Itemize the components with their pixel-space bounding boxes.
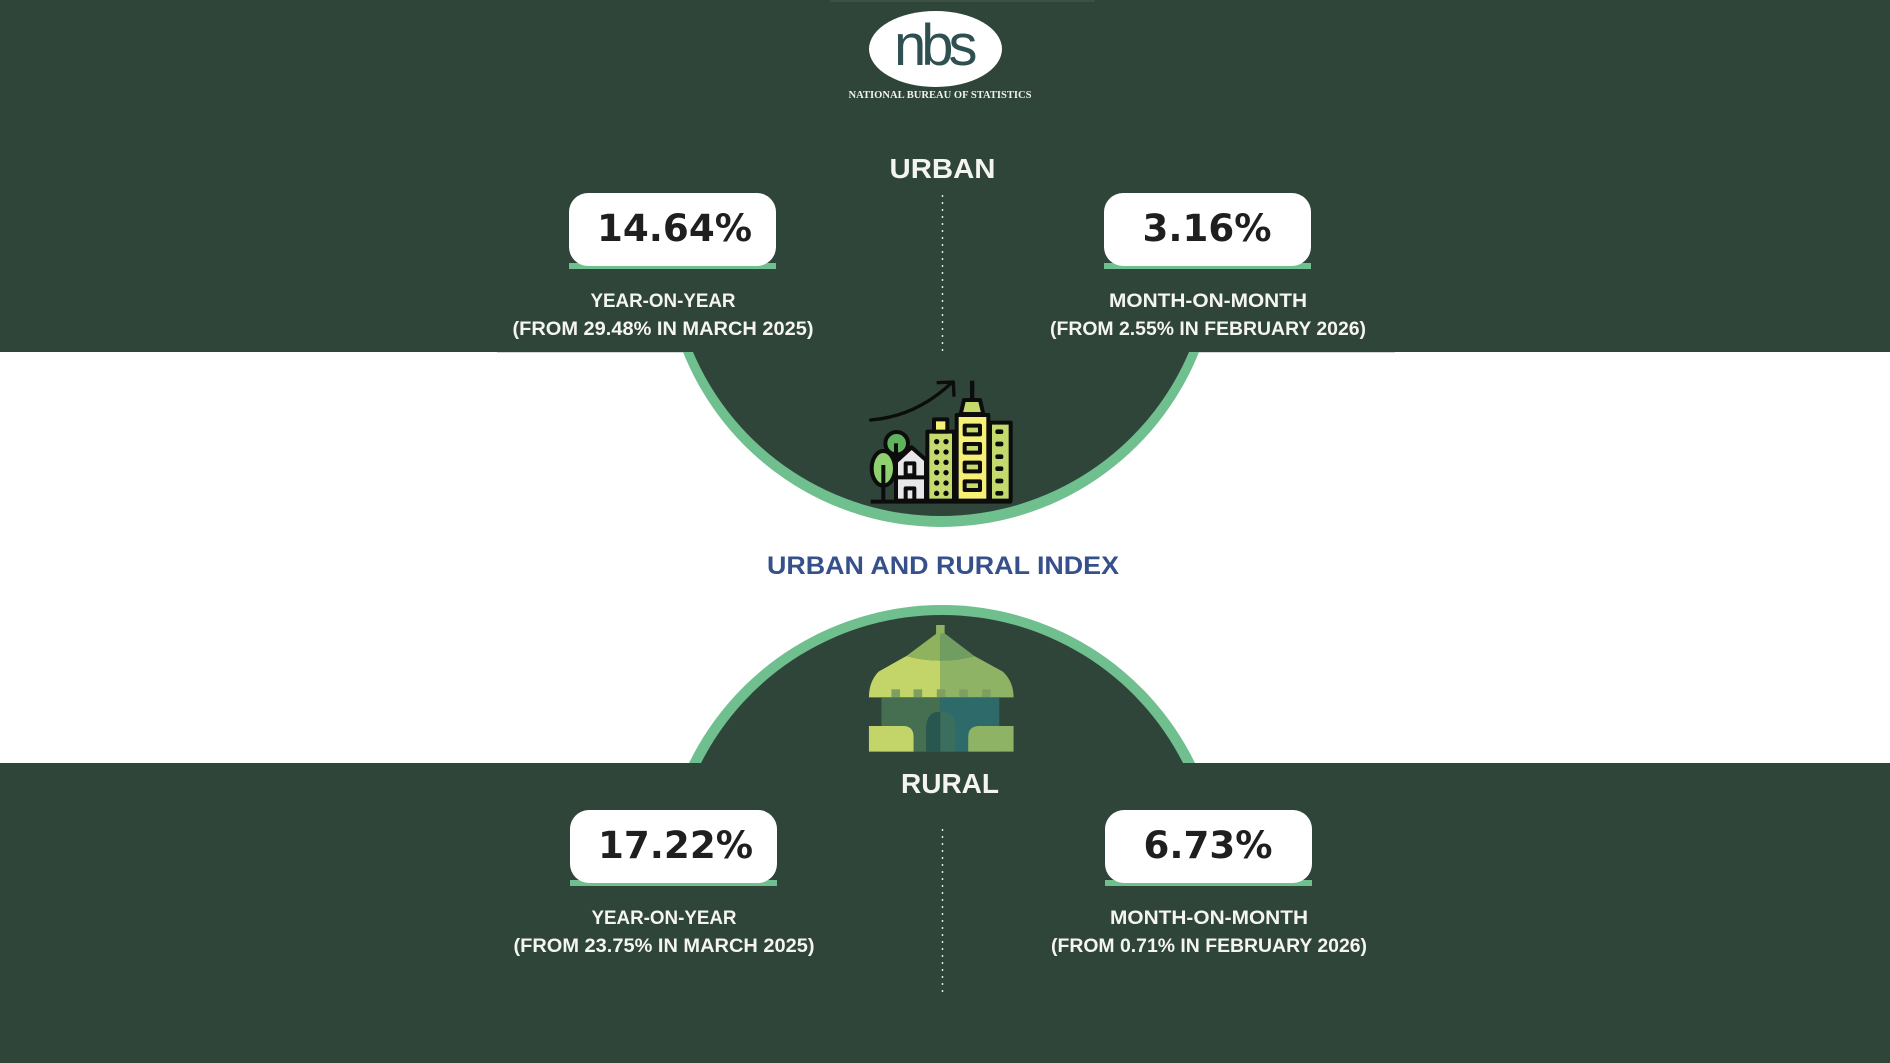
stat: rural year-on-year bbox=[514, 810, 814, 957]
stat: urban month-on-month: 3.16% bbox=[1142, 207, 1272, 250]
divider: rural dotted line bbox=[942, 829, 944, 994]
panel: top dark band bbox=[0, 0, 1890, 352]
icon: rural hut bbox=[869, 625, 1014, 752]
stat: rural month-on-month: (FROM 0.71% IN FEBRUARY 2026) bbox=[1051, 936, 1367, 957]
logo: NBS: NATIONAL BUREAU OF STATISTICS bbox=[848, 90, 1032, 101]
stat: urban year-on-year: 14.64% bbox=[597, 207, 752, 250]
stat: rural month-on-month: 6.73% bbox=[1144, 824, 1272, 867]
stat: urban year-on-year: (FROM 29.48% IN MARCH 2025) bbox=[512, 319, 814, 340]
logo: NBS bbox=[848, 11, 1032, 101]
panel: upper semicircle bbox=[683, 352, 1199, 527]
stat: urban month-on-month: MONTH-ON-MONTH bbox=[1109, 291, 1307, 312]
panel: bottom dark band bbox=[0, 763, 1890, 1063]
stat: urban year-on-year: YEAR-ON-YEAR bbox=[590, 291, 736, 312]
stat: rural month-on-month bbox=[1051, 810, 1367, 957]
stat: rural year-on-year: (FROM 23.75% IN MARCH 2025) bbox=[514, 936, 814, 957]
icon: city with rising arrow bbox=[871, 381, 1012, 502]
panel: lower semicircle bbox=[689, 605, 1195, 763]
divider: urban dotted line bbox=[942, 195, 944, 356]
stat: urban year-on-year bbox=[512, 193, 814, 340]
stat: urban month-on-month bbox=[1050, 193, 1366, 340]
stat: rural month-on-month: MONTH-ON-MONTH bbox=[1110, 908, 1308, 929]
stat: urban month-on-month: (FROM 2.55% IN FEBRUARY 2026) bbox=[1050, 319, 1366, 340]
heading: rural: RURAL bbox=[901, 768, 999, 799]
stat: rural year-on-year: 17.22% bbox=[598, 824, 753, 867]
title: urban and rural index: URBAN AND RURAL INDEX bbox=[767, 552, 1119, 580]
stat: rural year-on-year: YEAR-ON-YEAR bbox=[592, 908, 737, 929]
heading: urban: URBAN bbox=[890, 153, 996, 184]
logo: NBS: nbs bbox=[894, 13, 976, 78]
